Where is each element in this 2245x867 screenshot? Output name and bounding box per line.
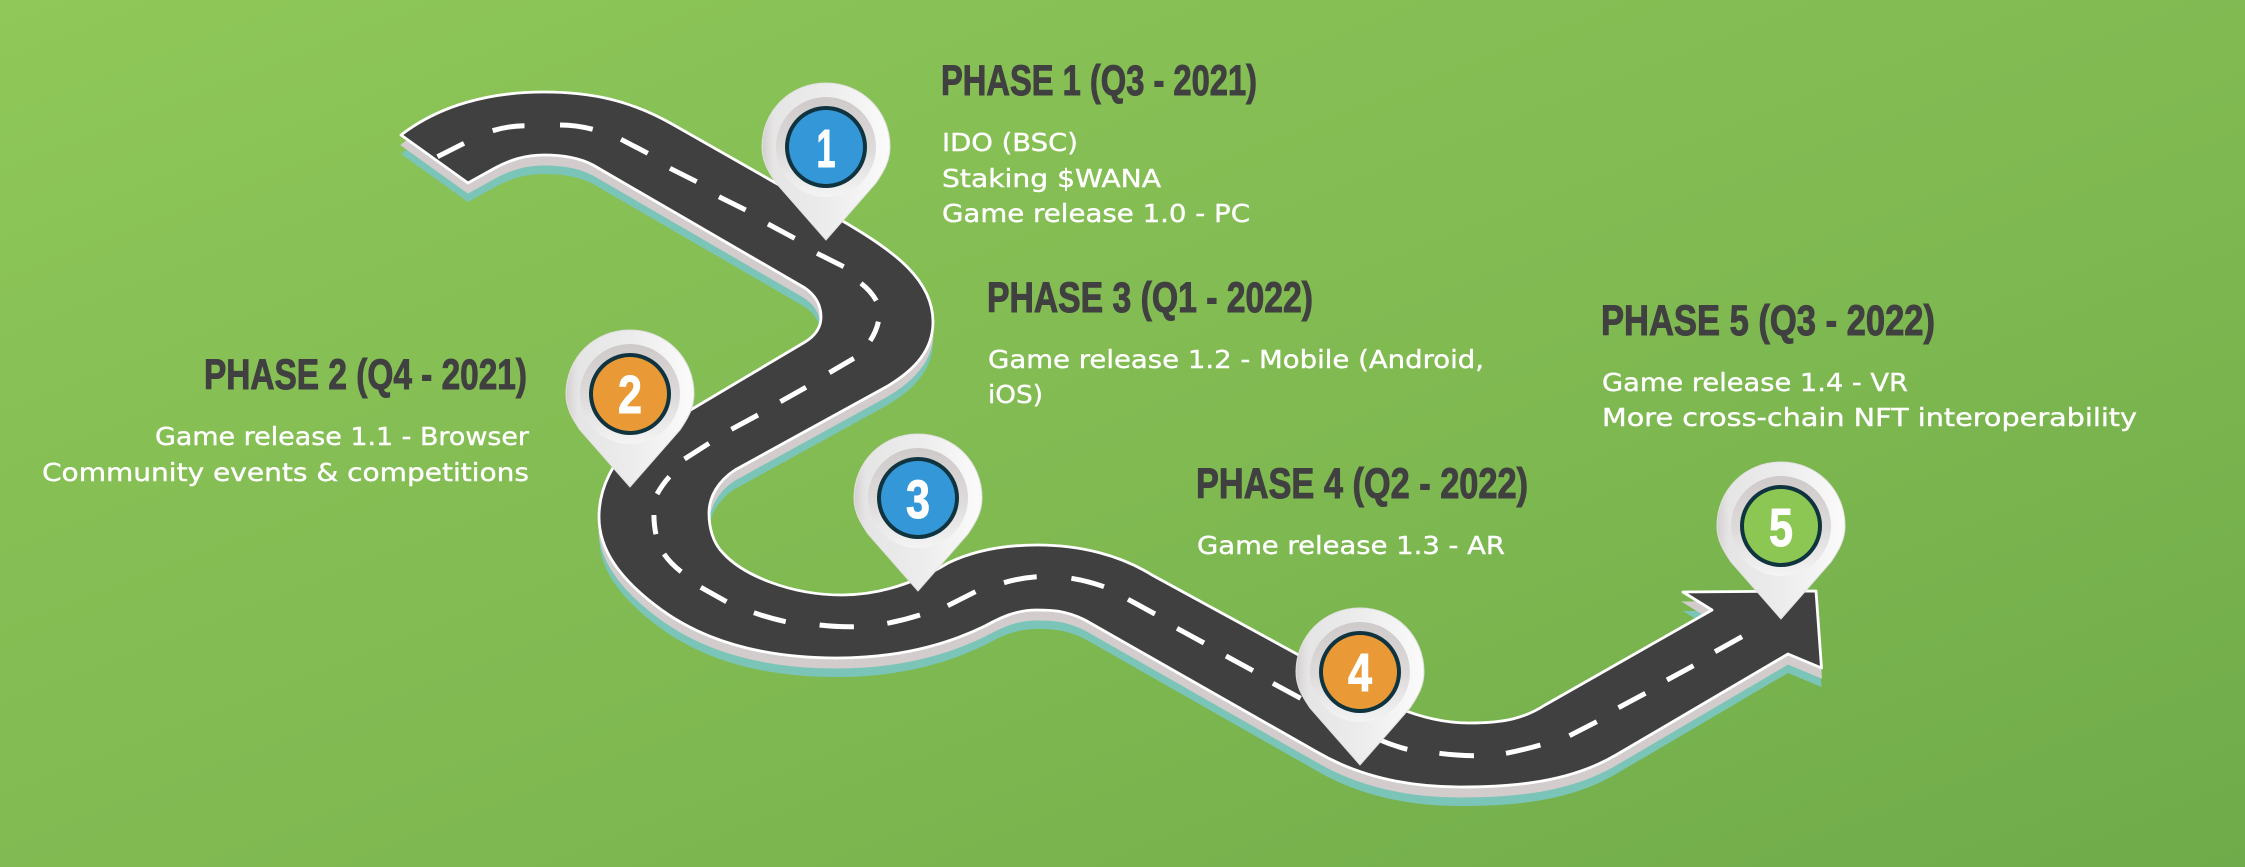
phase 2 text block <box>42 351 530 487</box>
phase 2 items <box>42 422 530 487</box>
pin 3 <box>854 434 982 591</box>
phase 1 items: IDO (BSC) <box>942 128 1078 157</box>
phase 1 items: Game release 1.0 - PC <box>942 199 1250 228</box>
pin 5: 5 <box>1769 498 1793 558</box>
phase 2 items: Game release 1.1 - Browser <box>155 422 530 451</box>
phase 5 items: More cross-chain NFT interoperability <box>1602 403 2137 432</box>
road centre dashes <box>438 125 1742 756</box>
phase 2 items: Community events & competitions <box>42 458 529 487</box>
phase 2 heading: PHASE 2 (Q4 - 2021) <box>204 351 527 399</box>
pin 4 <box>1296 608 1424 765</box>
phase 4 text block <box>1196 460 1528 560</box>
phase 1 heading: PHASE 1 (Q3 - 2021) <box>941 57 1257 105</box>
phase 4 item: Game release 1.3 - AR <box>1197 531 1505 560</box>
pin 5 <box>1717 462 1845 619</box>
phase 5 items <box>1602 368 2137 432</box>
phase 1 items: Staking $WANA <box>942 164 1161 193</box>
phase 3 items: Game release 1.2 - Mobile (Android, <box>988 345 1484 374</box>
pin 2 <box>566 330 694 487</box>
pin 3: 3 <box>906 470 930 530</box>
phase 5 items: Game release 1.4 - VR <box>1602 368 1908 397</box>
pin 4: 4 <box>1348 643 1372 703</box>
phase 5 text block <box>1601 297 2137 432</box>
phase 5 heading: PHASE 5 (Q3 - 2022) <box>1601 297 1935 345</box>
phase 4 heading: PHASE 4 (Q2 - 2022) <box>1196 460 1528 508</box>
phase 3 heading: PHASE 3 (Q1 - 2022) <box>987 274 1313 322</box>
pin 2: 2 <box>618 365 642 425</box>
phase 3 text block <box>987 274 1484 409</box>
phase 3 items <box>988 345 1484 409</box>
phase 1 items <box>942 128 1250 228</box>
winding road <box>401 92 1822 806</box>
pin 1 <box>762 83 890 240</box>
phase 3 items: iOS) <box>988 380 1043 409</box>
pin 1: 1 <box>816 119 836 179</box>
phase 1 text block <box>941 57 1257 228</box>
